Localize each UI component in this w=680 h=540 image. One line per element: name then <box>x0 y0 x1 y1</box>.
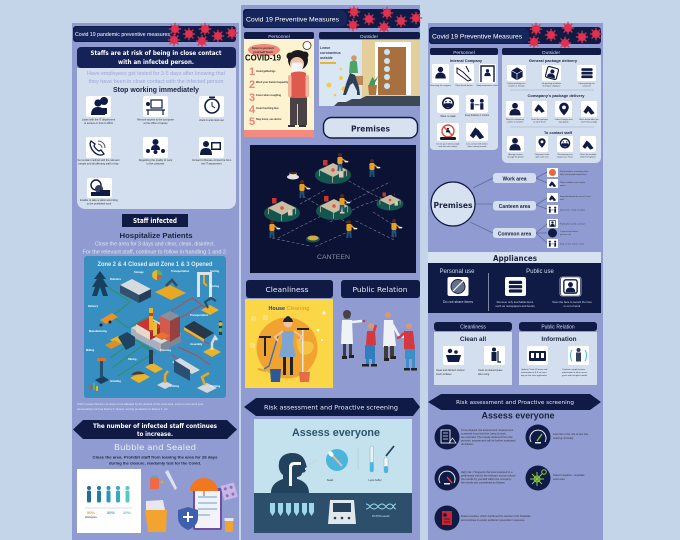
poster: how to protect from covid-19: Cover when coughing <box>256 94 282 97</box>
label: outsider: Outsider <box>360 34 378 40</box>
illustration: leave coronavirus outside: coronavirus <box>320 51 341 55</box>
icon: sanitise: Less contact with others <box>466 142 488 146</box>
item: virus negative <box>526 466 585 490</box>
icon: call <box>507 136 524 158</box>
heading: number of infected staff continues: to increase. <box>137 431 173 438</box>
work area items: space <box>560 185 566 187</box>
left header banner: Covid 19 pandemic preventive measures <box>75 32 170 38</box>
work area items: office and provide temp-check <box>560 173 587 176</box>
tube row <box>270 503 314 516</box>
icon: delivery person <box>506 101 524 124</box>
icon: hand and box <box>531 101 549 124</box>
illustration: doctors and patients <box>341 310 417 370</box>
icon: package sanitize <box>542 65 561 88</box>
icon: sanitize hands: touch the package <box>581 120 598 124</box>
item: low risk gauge <box>526 424 589 450</box>
label: outsider <box>319 32 420 40</box>
DNA strand <box>366 504 396 509</box>
machines <box>90 272 222 393</box>
icon: work structure: to the customer <box>147 162 165 166</box>
map labels: Grinding <box>110 379 121 383</box>
icon: screening: Screening for everyone <box>430 85 452 87</box>
text: update covid: day on the Line application <box>521 374 548 377</box>
icon: information person <box>568 346 589 365</box>
icon: wear a mask: Wear a mask <box>440 114 456 118</box>
text: clean and disinfect <box>436 369 465 376</box>
power tower <box>92 271 108 296</box>
label: public relation: Public Relation <box>541 325 575 331</box>
button: premises <box>324 118 418 138</box>
item: high risk gauge: the results are considered as follows: <box>461 480 505 484</box>
icon: clock in: clock in and clock out <box>199 118 224 122</box>
common area items: 1 spot at each times <box>560 230 578 233</box>
icon: contact IT: Contact to Bureau contact be from <box>192 158 231 162</box>
poster: how to protect from covid-19: How to protect <box>252 46 274 50</box>
item: high risk gauge: preliminary visit by the relevant source (show) <box>461 474 516 478</box>
label: outsider: Outsider <box>542 50 560 56</box>
text: continue supply <box>562 368 588 377</box>
icon: package checklist <box>577 65 596 88</box>
icon: package drop <box>507 65 527 88</box>
heading: clean all: Clean all <box>460 336 486 343</box>
heading: assess everyone: Assess everyone <box>482 410 554 420</box>
icon: location person <box>555 101 572 124</box>
map labels: Assembly <box>190 342 203 346</box>
icon: remote access: at the office or laptop <box>143 121 168 125</box>
assess everyone title: Assess everyone <box>292 427 380 439</box>
item: positive report: Detect positive, which confirmed by results in the hospitals <box>461 514 531 518</box>
item: assessment checklist: To be cleared risk assessment: Assessment <box>461 428 513 432</box>
common area items: person in lift <box>560 233 571 236</box>
icon: hand box: Clean the package <box>580 153 597 156</box>
icon: remote access: Remote access to the computer <box>137 118 174 122</box>
icon: hand and box: Touch the package <box>531 118 549 121</box>
label: public relation: Public Relation <box>352 286 408 294</box>
item: high risk gauge: High risk = Suspects the level exposed to a <box>461 470 513 474</box>
panel: stop working immediately <box>77 68 236 209</box>
icon: location person: Collect charges and <box>555 118 572 121</box>
icon: phone: people and all affecting staff or bay <box>78 162 119 166</box>
heading: bubble and sealed: Bubble and Sealed <box>114 443 196 452</box>
public use: Scan the face to record the time <box>552 300 592 304</box>
work area items: Clean sanitation and cubicle <box>560 181 586 184</box>
heading: staff infected <box>122 214 188 227</box>
icon: hand wash: Clean hands before <box>455 85 474 87</box>
illustration: assess everyone swab test: Swab <box>327 478 334 482</box>
icon: information screen <box>527 346 548 365</box>
icon: sanitize hands: Wash hands after you <box>579 118 599 121</box>
icon: phone <box>78 137 120 166</box>
illustration: house cleaning <box>245 299 333 388</box>
map labels: Transportation <box>171 269 190 273</box>
map labels: Painting <box>210 384 221 388</box>
icon: distance: Keep distance 1 metres <box>465 114 490 117</box>
poster character with mask <box>286 50 309 127</box>
heading: staffs at risk: Staffs are at risk of being in close contact <box>90 50 222 57</box>
heading: staffs at risk <box>77 47 236 68</box>
illustration: assess everyone swab test: RT-PCR reaction <box>372 515 391 518</box>
map labels: Sorting <box>210 284 219 288</box>
icon: no entry: Do not go in where people <box>436 142 461 146</box>
map labels: Slicing <box>128 357 137 361</box>
chart: zone factory map <box>84 256 226 398</box>
poster: how to protect from covid-19: 2 <box>249 79 255 91</box>
left header banner <box>73 23 238 47</box>
map labels <box>86 269 221 388</box>
text: close the area 28 days: Close the area. Prohibit staff from leaving the area for 28 days <box>92 454 218 460</box>
icon: package sanitize: No package to deliver <box>542 82 561 85</box>
chart: people pictogram <box>77 469 141 533</box>
illustration: house cleaning: House Cleaning <box>268 306 310 312</box>
right header banner: Covid 19 Preventive Measures <box>432 34 523 40</box>
icon: call: through the phone <box>507 156 524 158</box>
chart: people pictogram: 20% <box>123 510 131 515</box>
item: virus negative: work area <box>553 477 565 481</box>
panel: right column <box>428 22 603 540</box>
poster: how to protect from covid-19: Avoid gatherings <box>256 70 276 73</box>
text: zone note <box>77 402 204 411</box>
canteen area items: Keep disinfected the seat in 1 seat <box>560 195 591 198</box>
work area items: Put up posters, screening of the <box>560 170 589 173</box>
heading: risk assessment banner right <box>428 394 601 410</box>
panel: public relation <box>519 322 597 385</box>
icon: work structure: Regarding the quality of work <box>139 158 173 162</box>
icon: sanitise: when coming to work <box>468 145 486 148</box>
poster: how to protect from covid-19 <box>244 39 314 137</box>
subheading: to contact staff: To contact staff <box>544 131 573 135</box>
map labels: Delivery <box>88 304 99 308</box>
heading: staff infected: Staff infected <box>133 217 177 225</box>
work area <box>493 173 536 183</box>
common area items: Sanitisation at exit 1 contact <box>560 222 585 226</box>
canteen area: Canteen area <box>499 204 530 210</box>
map labels: Pressing <box>160 348 171 352</box>
map labels: Milling <box>86 348 95 352</box>
poster: how to protect from covid-19: Stay home, see doctor <box>256 118 282 121</box>
PCR machine <box>328 500 356 524</box>
middle header banner <box>243 6 422 33</box>
icon: package drop: counter or location <box>508 84 525 88</box>
personal use: Personal use <box>439 269 475 275</box>
text: clean up shared space: after using <box>478 373 490 376</box>
work area: Work area <box>502 176 527 182</box>
heading: risk assessment banner right: Risk assessment and Proactive screening <box>456 400 574 406</box>
icon: cleaning bucket <box>443 346 464 365</box>
icon: package drop: Deliver package to a <box>507 82 527 85</box>
text: update covid <box>521 368 548 377</box>
swab circle <box>326 449 348 471</box>
heading: stop working immediately: Stop working immediately <box>113 87 199 94</box>
red zone connectors <box>170 298 210 369</box>
illustration: medicine and insurance <box>145 470 238 532</box>
panel: left column <box>72 23 239 540</box>
icon: hand box <box>580 136 597 158</box>
icon: work from home <box>82 96 115 125</box>
item: high risk gauge: the results by yourself within the company; <box>461 477 512 481</box>
label: cleanliness: Cleanliness <box>266 286 309 294</box>
subheading: internal company: Internal Company <box>450 59 483 63</box>
map labels: Sorting <box>210 269 219 273</box>
button: premises: Premises <box>351 124 390 134</box>
text: zone note: (temporarily) such as factory 1 closed, moving production to factory 1, etc. <box>77 407 169 411</box>
common area items <box>547 219 585 248</box>
icon: work structure <box>139 137 173 166</box>
heading: number of infected staff continues <box>73 420 237 439</box>
text: update covid: information at 6 & as soon <box>521 371 547 374</box>
text: close the area <box>82 242 228 256</box>
common area items: Stay 1-2 to 1 seat to 1 seat <box>560 242 584 246</box>
heading: appliances: Appliances <box>493 254 537 263</box>
poster: how to protect from covid-19: 1 <box>249 66 255 78</box>
test tubes <box>370 446 394 473</box>
icon: hand box: before bringing in <box>580 156 596 158</box>
heading: risk assessment banner: Risk assessment and Proactive screening <box>264 406 398 412</box>
item: assessment checklist: as follows: <box>461 442 474 446</box>
icon: package checklist: sanitised <box>583 84 590 88</box>
central factory <box>131 308 181 352</box>
icon: delivery person: Wrap in a temporary <box>506 118 524 121</box>
poster: how to protect from covid-19: COVID-19 <box>245 54 282 62</box>
head silhouette <box>271 453 309 493</box>
illustration: assess everyone swab test <box>254 419 412 533</box>
heading: staffs at risk: with an infected person. <box>118 59 194 66</box>
map labels: Transportation <box>190 313 209 317</box>
item: assessment checklist <box>434 424 516 450</box>
icon: delivery person: counter or location <box>507 120 523 124</box>
map labels: Storage <box>134 270 144 274</box>
label: cleanliness <box>246 280 333 298</box>
icon: sanitise <box>466 123 488 148</box>
subheading: general package delivery: General package delivery <box>529 58 578 63</box>
pie chart <box>152 270 162 280</box>
label: personnel: Personnel <box>453 50 475 56</box>
text: continue supply: Continue supply human <box>562 368 586 371</box>
icon: sanitize hands <box>579 101 599 124</box>
icon: hand and box: to clean them <box>533 120 546 124</box>
illustration: leave coronavirus outside <box>319 40 420 106</box>
icon: mask: proper face mask <box>557 156 573 158</box>
icon: location pin: open safe area <box>535 156 550 158</box>
item: positive report <box>434 506 531 530</box>
poster: how to protect from covid-19: Avoid touching face <box>256 107 279 110</box>
coffee cup <box>287 172 299 180</box>
item: assessment checklist: process, assessment will be further evaluated <box>461 438 516 442</box>
item: low risk gauge: Low risk in the risk or low risk, <box>553 432 589 436</box>
canteen area items: Queue line - Keep 1-2 steps <box>560 208 585 212</box>
heading: hospitalize patients: Hospitalize Patients <box>120 233 193 240</box>
text: close the area 28 days <box>92 454 218 466</box>
text: get tested: Have employees get tested for 3-5 days after knowing that <box>87 71 225 77</box>
label: personnel <box>244 32 314 40</box>
public use: Public use <box>526 269 555 275</box>
panel: cleanliness <box>434 322 512 385</box>
icon: salon: to the published work <box>87 202 112 206</box>
map labels: Manufacturing <box>89 329 107 333</box>
text: close the area: Close the area for 3 days and clear, clean, disinfect. <box>95 242 215 248</box>
label: personnel: Personnel <box>268 34 290 40</box>
illustration: leave coronavirus outside: Leave <box>320 46 330 50</box>
personal use <box>439 269 475 304</box>
poster: how to protect from covid-19: 5 <box>249 116 255 128</box>
diagram: premises tree <box>431 168 591 248</box>
icon: salon: Enable to take a salon according <box>80 198 118 202</box>
icon: call: Arrange contact <box>508 153 523 156</box>
panel: outsider <box>502 48 601 163</box>
text: close the area 28 days: during the closure, randomly test for the Covid. <box>109 460 201 466</box>
text: close the area: For the relevant staff, continue to follow in handling 1 and 2. <box>82 250 228 256</box>
panel: middle column <box>241 5 422 540</box>
poster: how to protect from covid-19: 3 <box>249 92 255 104</box>
text: zone note: Staff in areas that are not close to but affected by the closure of the work area, move to new work post <box>77 402 204 406</box>
icon: location pin <box>535 136 550 158</box>
premises circle <box>431 182 475 226</box>
public use: in out of work <box>564 304 581 308</box>
text: clean up shared space: Clean up shared space <box>478 369 503 372</box>
item: low risk gauge: working normally. <box>553 436 574 440</box>
poster: how to protect from covid-19: Wash your hands frequently <box>256 81 289 84</box>
icon: clock in <box>199 96 224 122</box>
chart: people pictogram: Workspace <box>85 516 98 519</box>
public use <box>495 269 592 308</box>
text: clean and disinfect: Clean and disinfect shared <box>436 369 465 372</box>
icon: no entry: wait with sick contact <box>439 145 458 148</box>
personal use: Do not share items <box>443 300 473 304</box>
heading: number of infected staff continues: The number of infected staff continues <box>93 423 217 430</box>
icon: contact IT <box>192 137 231 166</box>
icon: contact IT: the IT department <box>201 162 222 166</box>
subheading: company's package delivery: Comapany's package delivery <box>528 93 585 98</box>
item: positive report: and continue to under epidemic prevention measures. <box>461 518 525 522</box>
icon: package sanitize: directly to employee <box>543 84 561 88</box>
item: assessment checklist: are reported. The results obtained from this <box>461 435 513 439</box>
label: public relation <box>341 280 420 298</box>
icon: cleaning person <box>484 346 505 365</box>
public use: such as newspapers and books <box>495 304 535 308</box>
map labels: Cutting <box>170 384 179 388</box>
icon: remote access <box>137 96 174 125</box>
poster: how to protect from covid-19: yourself from <box>253 50 273 54</box>
chart: people pictogram: 50% <box>87 510 95 515</box>
panel: appliances <box>428 263 601 313</box>
text: clean and disinfect: touch surfaces <box>436 373 452 376</box>
text: get tested: they have been in close contact with the infected person <box>88 79 224 85</box>
icon: work from home: to access or how to WFH <box>84 121 113 125</box>
text: continue supply: information to other areas <box>562 371 588 374</box>
heading: appliances <box>428 252 601 263</box>
green zone connectors <box>105 285 156 376</box>
middle header banner: Covid 19 Preventive Measures <box>246 16 340 24</box>
common area: Common area <box>498 231 531 237</box>
poster: how to protect from covid-19: 4 <box>249 104 256 116</box>
work area items <box>547 168 589 188</box>
icon: phone: Set contact method with the relevant <box>78 158 120 162</box>
common area <box>493 228 536 238</box>
premises circle: Premises <box>434 201 473 210</box>
canteen area items <box>547 193 591 214</box>
text: update covid: Update Covid 19 news and <box>521 368 548 371</box>
right header banner <box>429 22 602 49</box>
item: high risk gauge <box>434 466 516 490</box>
item: virus negative: Detect negative - separate <box>553 473 585 477</box>
icon: body scanner: Body temperature check <box>477 84 498 87</box>
icon: location person: sign goods <box>559 122 568 124</box>
illustration: leave coronavirus outside: outside <box>320 56 333 60</box>
icon: work from home: Liaise with the IT department <box>82 118 115 122</box>
illustration: assess everyone swab test: Lysis buffer <box>368 478 382 482</box>
icon: mask <box>557 136 573 158</box>
dashed paths <box>272 176 395 247</box>
text: continue supply: given with recipient media <box>562 374 588 377</box>
canteen area <box>493 201 536 210</box>
warehouse <box>120 279 151 303</box>
map labels: Robotics <box>110 277 122 281</box>
icon: no entry <box>436 123 461 148</box>
icon: package checklist: Clean package for <box>578 83 595 85</box>
illustration: canteen <box>250 145 416 273</box>
item: assessment checklist: screened must test free, keep at work <box>461 432 506 436</box>
map title: Zone 2 & 4 Closed and Zone 1 & 3 Opened <box>98 261 213 268</box>
icon: salon <box>80 178 118 206</box>
icon: mask: The meeting is in <box>557 153 573 156</box>
heading: risk assessment banner <box>244 398 420 416</box>
text: get tested <box>87 71 225 85</box>
icon: location pin: Only meet in the <box>535 153 550 156</box>
text: clean up shared space <box>478 369 503 376</box>
chart: people pictogram: 30% <box>107 510 115 515</box>
canteen label: CANTEEN <box>317 254 350 261</box>
canteen area items: ratio <box>560 198 565 201</box>
panel: personnel <box>430 48 498 150</box>
plate <box>306 236 320 242</box>
heading: information: Information <box>541 336 577 343</box>
label: cleanliness: Cleanliness <box>460 325 486 331</box>
public use: Remove only touchable items <box>497 300 534 304</box>
